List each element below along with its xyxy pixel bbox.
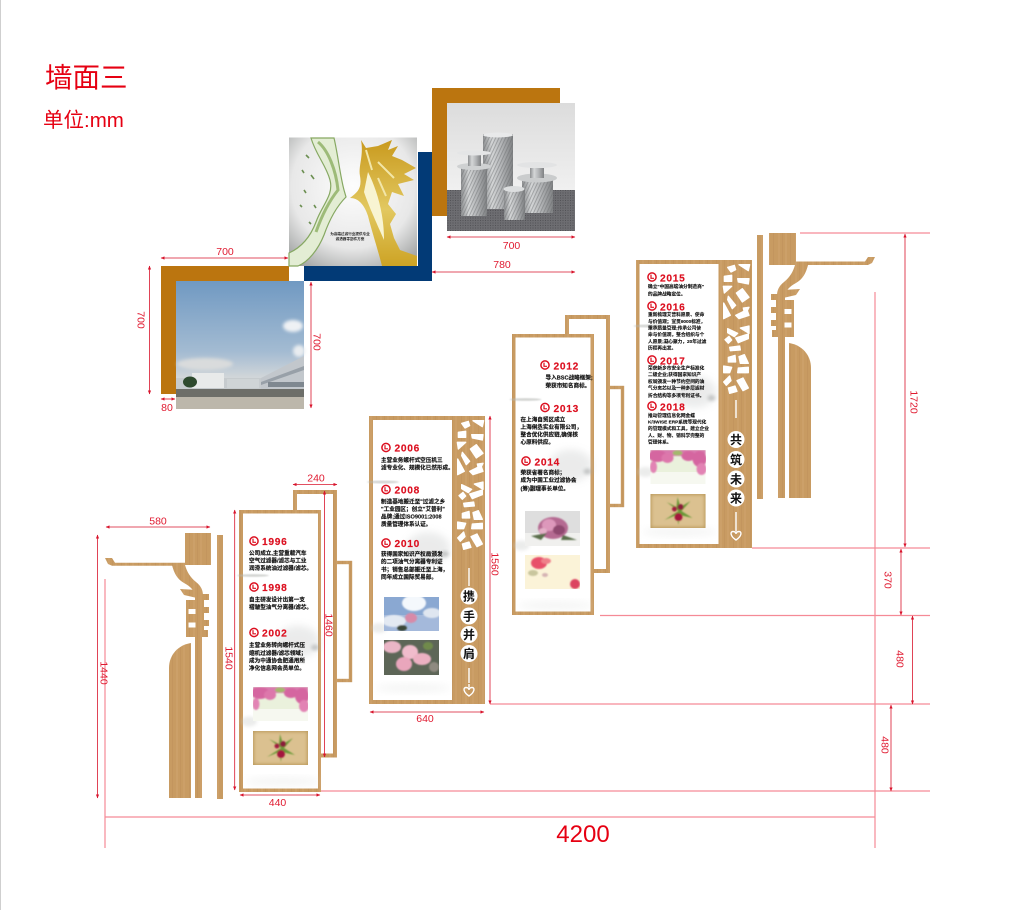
dimension: photo wall: 700 <box>310 333 322 351</box>
year entry 2015: 的品牌战略定位。 <box>648 290 686 298</box>
dimension: height stack: 480 <box>894 650 906 668</box>
dimension: height stack <box>878 234 920 791</box>
year entry 2016: 重新梳理艾普科愿景、使命 <box>648 311 705 318</box>
vertical slogan: 共 <box>730 433 742 447</box>
dimension: panel 2: 640 <box>416 713 434 725</box>
year entry 2013: 整合优化供应链,确保核 <box>520 430 578 438</box>
photo: oil splash poster: 滤清器零部件方案 <box>336 236 365 241</box>
year entry 2017: 权局颁发一种节约空间的油 <box>648 378 705 385</box>
year entry 2016: 与价值观；宣贯9000标准， <box>648 318 705 325</box>
year entry 2014: 2014 <box>534 458 560 468</box>
panel: 2006-2010 <box>367 416 485 704</box>
wood cutout right <box>757 233 875 499</box>
lattice <box>457 421 484 549</box>
image: pink blossoms <box>251 687 309 721</box>
dimension: height stack: 480 <box>878 736 890 754</box>
lattice <box>723 265 750 393</box>
year entry 2008 <box>381 485 446 528</box>
panel: photo wall <box>161 88 575 409</box>
year entry 2002: 缩机过滤器/滤芯领域； <box>249 649 306 657</box>
dimension: panel 1: 440 <box>269 797 286 809</box>
photo: factory <box>176 281 305 409</box>
dimension: panel 1 <box>98 472 337 809</box>
year entry 2016: 秉承质量管理;传承公司使 <box>648 324 701 332</box>
year entry 2017: 折合结构等多项专利证书。 <box>648 392 704 399</box>
photo: filter cartridges <box>447 103 575 231</box>
year entry 2012 <box>541 361 593 390</box>
vertical slogan: 筑 <box>730 452 742 467</box>
year entry 2013: 在上海自贸区成立 <box>520 416 566 424</box>
year entry 2014: 荣获省著名商标； <box>520 468 565 476</box>
year entry 2014: (筹)副理事长单位。 <box>520 484 569 492</box>
image: parchment flower <box>253 731 308 765</box>
image: parchment flower <box>650 494 706 528</box>
year entry 2013: 上海俐丞实业有限公司， <box>520 423 582 431</box>
year entry 1996 <box>249 537 312 572</box>
year entry 2008: "工业园区；创立"艾普利" <box>381 505 445 513</box>
image: pink blossoms <box>648 450 706 484</box>
year entry 2008: 品牌;通过ISO9001:2008 <box>381 512 442 520</box>
year entry 1998: 自主研发设计出第一支 <box>249 596 305 604</box>
dimension: height stack: 370 <box>882 571 894 589</box>
year entry 1996: 润滑系统油过滤器/滤芯。 <box>249 564 312 572</box>
year entry 2018: 推动管理信息化网金蝶 <box>648 412 695 419</box>
year entry 2010: 的二项油气分离器专利证 <box>381 558 443 566</box>
year entry 2012: 导入BSC战略框架; <box>546 374 593 382</box>
year entry 2008: 质量管理体系认证。 <box>381 520 431 528</box>
year entry 2018: K/3WISE ERP系统等现代化 <box>648 418 707 426</box>
vertical slogan <box>728 400 744 540</box>
year entry 2015: 确立"中国高端油分制造商" <box>648 283 704 290</box>
year entry 2008: 制造基地搬迁至"过滤之乡 <box>381 498 446 506</box>
year entry 2013: 心原料供应。 <box>520 438 554 446</box>
year entry 1998: 褶皱型油气分离器/滤芯。 <box>249 603 312 611</box>
vertical slogan <box>460 568 478 696</box>
year entry 2018: 人、财、物、销科学完整的 <box>648 432 705 439</box>
year entry 2010: 同年成立国际贸易部。 <box>381 573 437 581</box>
year entry 2006 <box>381 443 454 472</box>
year entry 2014: 成为中国工业过滤协会 <box>520 476 577 484</box>
dimension: panel 2 <box>370 416 500 725</box>
vertical slogan: 携 <box>463 588 475 604</box>
dimension: photo wall: 700 <box>134 311 146 329</box>
dimension: panel 1: 240 <box>307 472 325 484</box>
year entry 2002: 成为中通协会肥通用所 <box>249 656 305 664</box>
total width label: 4200 <box>556 821 610 848</box>
year entry 2012: 2012 <box>554 362 579 372</box>
year entry 1996: 空气过滤器/滤芯与工业 <box>249 556 307 564</box>
navy corner frame <box>304 152 432 281</box>
dimension: photo wall: 700 <box>216 246 234 258</box>
year entry 2017: 荣获新乡市安全生产标准化 <box>648 364 705 372</box>
year entry 2013 <box>520 403 582 446</box>
year entry 2006: 主营业务螺杆式空压机三 <box>381 456 443 464</box>
year entry 2017: 气分离芯以及一种多层滤材 <box>648 384 705 392</box>
year entry 2016: 命与价值观，整合组织与个 <box>648 331 705 338</box>
brown corner frame left <box>161 266 289 394</box>
year entry 2017 <box>648 356 705 399</box>
year entry 2010: 书；销售总部搬迁至上海， <box>381 566 448 574</box>
year entry 2016: 2016 <box>660 302 685 314</box>
year entry 2018: 管理体系。 <box>648 438 671 446</box>
vertical slogan: 肩 <box>463 646 475 661</box>
dimension: panel 1: 580 <box>149 516 167 528</box>
image: chrysanthemum bouquet <box>525 511 580 546</box>
dimension: panel 1: 1540 <box>222 646 234 670</box>
panel: 1996-2002 <box>237 492 350 792</box>
year entry 2002: 净化信息网会员单位。 <box>249 664 305 672</box>
year entry 2012: 荣获市知名商标。 <box>546 382 590 390</box>
year entry 1996: 公司成立,主营重载汽车 <box>249 549 307 557</box>
year entry 2018: 的管理模式和工具，建立企业 <box>648 425 709 432</box>
year entry 2006: 2006 <box>394 444 420 454</box>
year entry 2002: 2002 <box>262 628 287 640</box>
image: sky flower <box>382 595 441 631</box>
year entry 2014 <box>520 457 577 492</box>
year entry 2010 <box>381 539 448 581</box>
year entry 2017: 2017 <box>660 356 685 368</box>
vertical slogan: 并 <box>463 627 475 642</box>
year entry 2002: 主营业务转向螺杆式压 <box>249 641 305 649</box>
unit label: 单位:mm <box>43 109 124 132</box>
year entry 1996: 1996 <box>262 537 287 548</box>
wood cutout left <box>105 533 223 799</box>
panel: 2015-2018 <box>634 260 752 548</box>
dimension: height stack: 1720 <box>908 390 920 414</box>
vertical slogan: 手 <box>463 608 475 624</box>
image: cream blossom <box>525 555 580 589</box>
brown corner frame right <box>432 88 560 216</box>
dimension: photo wall: 80 <box>161 402 173 414</box>
dimension: photo wall: 780 <box>493 259 511 271</box>
dimension: panel 1: 1460 <box>322 613 334 637</box>
year entry 2018 <box>648 402 709 446</box>
year entry 2002 <box>249 628 306 672</box>
year entry 2016 <box>648 302 707 352</box>
dimension: photo wall <box>134 237 575 414</box>
year entry 1998 <box>249 583 312 611</box>
year entry 2016: 历程再出发。 <box>648 344 676 352</box>
title: 墙面三 <box>45 62 128 93</box>
dimension lines <box>105 233 930 848</box>
poster caption: 为高端过滤行业提供专业 <box>330 231 370 236</box>
dimension: photo wall: 700 <box>503 240 520 252</box>
image: peach blossoms <box>383 640 439 675</box>
year entry 2010: 2010 <box>394 539 420 550</box>
photo: oil splash poster <box>289 138 417 266</box>
year entry 2013: 2013 <box>554 404 579 415</box>
panel: 2012-2014 <box>510 317 622 615</box>
year entry 2018: 2018 <box>660 402 685 414</box>
vertical slogan: 未 <box>730 472 742 486</box>
year entry 2015 <box>648 273 704 298</box>
year entry 2006: 滤专业化、规模化已然形成。 <box>381 464 454 472</box>
year entry 2016: 人愿景;凝心聚力，20年过滤 <box>648 338 707 345</box>
year entry 2008: 2008 <box>394 486 420 496</box>
year entry 2017: 二级企业;获得国家知识产 <box>648 371 701 378</box>
vertical slogan: 来 <box>730 490 742 506</box>
dimension: panel 1: 1440 <box>98 661 110 685</box>
dimension: panel 2: 1560 <box>488 552 500 576</box>
year entry 2010: 获得国家知识产权局颁发 <box>381 550 443 558</box>
year entry 2015: 2015 <box>660 274 685 284</box>
year entry 1998: 1998 <box>262 583 287 594</box>
